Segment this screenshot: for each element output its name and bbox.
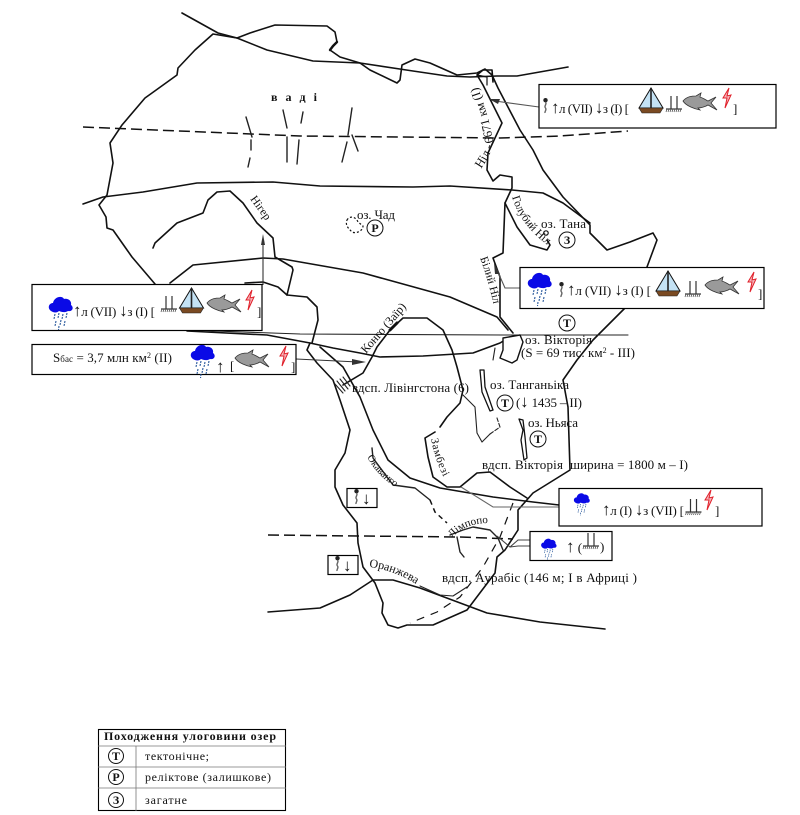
arrow: Congo leader	[296, 359, 366, 365]
legend item: tectonic: тектонічне;	[145, 749, 209, 763]
label: Victoria area: 2	[603, 346, 607, 355]
panel: White Nile regime: ↑л (VII) ↓з (І) [	[567, 280, 651, 299]
panel: Nile regime: ↑л (VII) ↓з (І) [	[551, 98, 629, 117]
panel: Niger regime: ]	[257, 304, 261, 319]
panel: Niger regime: ↑л (VII) ↓з (І) [	[73, 301, 155, 320]
map: climate belt boundaries	[83, 13, 605, 629]
panel: Orange regime: ↓	[343, 556, 352, 575]
symbol: Tana dammed basin	[559, 232, 575, 248]
label: Zambezi: Замбезі	[431, 438, 450, 477]
panel: Nile regime: ]	[733, 101, 737, 116]
map: tropic of Capricorn dashed line	[268, 535, 513, 539]
symbol: Chad relict basin	[367, 220, 383, 236]
panel: Limpopo regime	[530, 532, 612, 560]
map: Orange river lower branch and dashed line	[410, 503, 513, 623]
map: Congo river	[343, 318, 500, 442]
lake: Nyasa	[519, 419, 527, 460]
symbol: Nyasa tectonic basin: Т	[534, 432, 542, 446]
panel: Nile regime	[539, 84, 776, 128]
panel: Congo regime: ]	[291, 359, 295, 374]
map: equator line	[187, 330, 628, 335]
arrow: Nile leader	[489, 99, 539, 107]
legend: basin origin of lakes	[98, 729, 286, 811]
panel: Orange regime	[328, 556, 358, 575]
arrow: White Nile leader	[494, 263, 520, 288]
label: Aughrabies falls: вдсп. Аурабіс (146 м; І в Африці )	[442, 570, 637, 585]
panel: Congo regime: [	[230, 358, 234, 373]
panel: Okavango regime: ↓	[362, 489, 370, 508]
legend item: relict: реліктове (залишкове)	[145, 770, 271, 784]
label: lake Tana: оз. Тана	[541, 216, 586, 231]
panel: Okavango regime	[347, 488, 377, 508]
legend item: tectonic	[108, 748, 209, 764]
arrow: Zambezi leader	[461, 487, 559, 507]
legend item: dammed: З	[113, 793, 119, 807]
lake: Victoria	[493, 335, 523, 363]
lake: Tanganyika	[480, 370, 493, 411]
map: wadi dashed channels	[246, 108, 358, 167]
symbol: Tanganyika tectonic basin	[497, 395, 513, 411]
legend heading: Походження улоговини озер	[104, 729, 276, 743]
symbol: Chad relict basin: Р	[371, 221, 379, 235]
label: Livingstone falls: вдсп. Лівінгстона (6)	[352, 380, 469, 395]
label: lake Chad: оз. Чад	[357, 207, 395, 222]
symbol: Tana dammed basin: З	[564, 233, 570, 247]
map: Limpopo river	[450, 527, 503, 557]
panel: White Nile regime: ]	[758, 286, 762, 301]
map: Zambezi river	[425, 432, 527, 498]
panel: White Nile regime	[520, 268, 764, 308]
legend item: tectonic: Т	[112, 749, 120, 763]
legend item: relict: Р	[112, 770, 120, 784]
label: lake Tanganyika: оз. Танганьіка	[490, 377, 569, 392]
map: coastline of Africa	[99, 25, 657, 628]
label: Orange: Оранжева	[370, 560, 418, 584]
panel: Zambezi regime: ]	[715, 503, 719, 518]
label: Limpopo: Лімпопо	[448, 518, 488, 538]
panel: Zambezi regime	[559, 488, 762, 526]
panel: Congo regime: ↑	[216, 357, 224, 376]
symbol: Tanganyika tectonic basin: Т	[501, 396, 509, 410]
label: Nile river length: Ніл - 6671 км (І)	[470, 88, 493, 169]
label: Tanganyika depth: (↓ 1435 – ІІ)	[516, 392, 582, 411]
label: Victoria area: (S = 69 тис. км	[521, 345, 603, 360]
label: Victoria area: - ІІІ)	[607, 345, 635, 360]
map: Okavango river	[372, 448, 447, 523]
panel: Congo regime: 2	[147, 351, 151, 360]
map: Livingstone falls mark	[335, 377, 350, 393]
arrow: Limpopo leaders	[497, 536, 530, 547]
label: Okavango: Окаванго	[368, 455, 397, 486]
symbol: Victoria tectonic basin	[559, 315, 575, 331]
label: Niger: Нігер	[250, 194, 269, 220]
map: Nile river system	[477, 70, 550, 333]
label: Blue Nile: Голубий Ніл	[512, 195, 550, 245]
panel: Congo regime	[32, 344, 296, 378]
label: Congo: Конго (Заїр)	[360, 304, 406, 354]
label: Victoria falls: вдсп. Вікторія	[482, 457, 563, 472]
label: White Nile: Білий Ніл	[480, 256, 500, 304]
symbol: Nyasa tectonic basin	[530, 431, 546, 447]
panel: Zambezi regime: ↑л (І) ↓з (VII) [	[602, 500, 684, 519]
label: lake Victoria: оз. Вікторія	[525, 332, 592, 347]
label: lake Nyasa: оз. Ньяса	[528, 415, 578, 430]
panel: Niger regime	[32, 284, 262, 330]
map: tropic of Cancer dashed line	[83, 127, 628, 138]
lake: Tana	[544, 231, 548, 235]
label: Niger	[250, 194, 269, 220]
legend item: dammed	[108, 792, 187, 808]
label: Victoria falls width: ширина = 1800 м – І)	[570, 457, 688, 472]
label: wadi: в а д і	[271, 90, 318, 104]
panel: Limpopo regime: )	[600, 539, 604, 554]
panel: Congo regime: (ІІ)	[151, 350, 172, 365]
panel: Congo regime: Sбас = 3,7 млн км	[53, 350, 147, 365]
map: Niger river	[153, 191, 318, 343]
symbol: Victoria tectonic basin: Т	[563, 316, 571, 330]
legend item: dammed: загатне	[145, 793, 187, 807]
lake: Chad dotted outline	[346, 217, 363, 233]
panel: Limpopo regime: ↑ (	[566, 537, 582, 556]
arrow: Niger leader	[261, 234, 265, 285]
